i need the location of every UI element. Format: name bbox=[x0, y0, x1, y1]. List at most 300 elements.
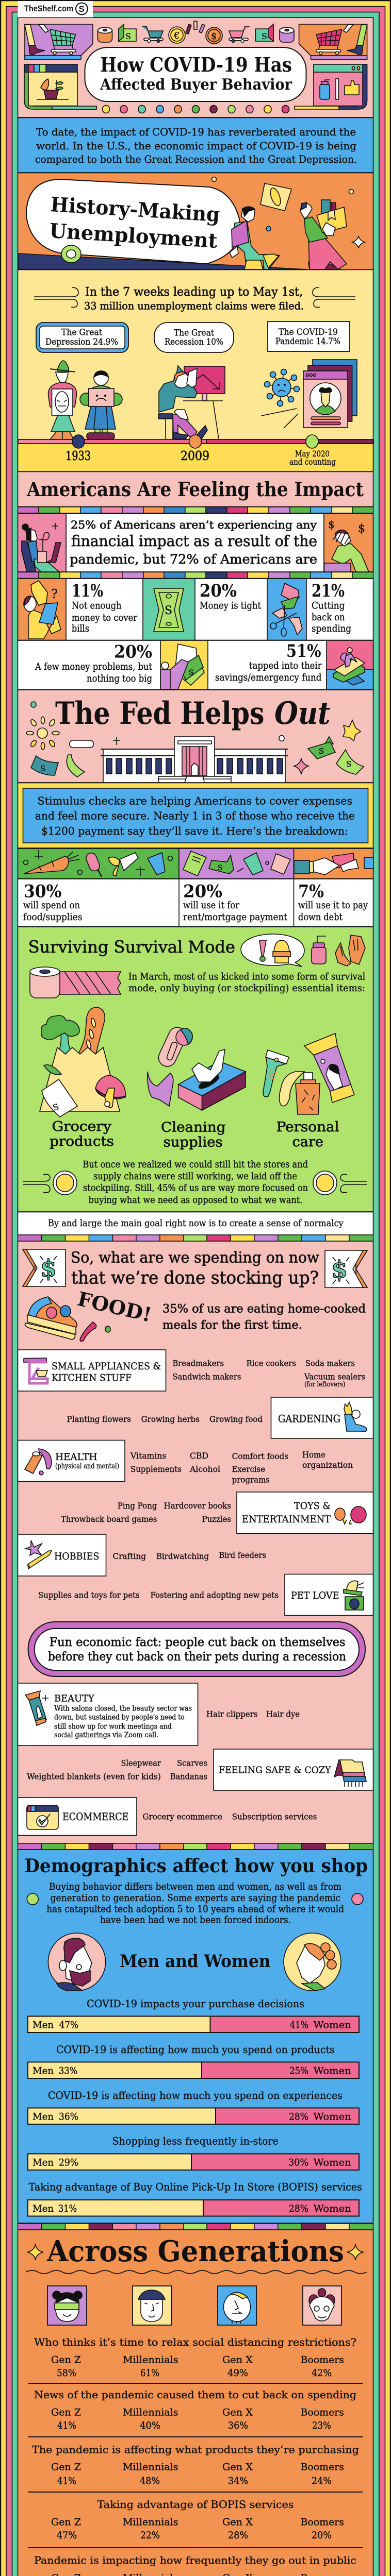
illustration: 2009 person at monitor bbox=[158, 366, 225, 441]
row: products purchasing: 48% bbox=[140, 2475, 160, 2486]
stat: 20 percent rent: rent/mortgage payment bbox=[183, 911, 287, 923]
row: relax restrictions: Boomers bbox=[300, 2354, 344, 2366]
row: products purchasing: Boomers bbox=[300, 2462, 344, 2473]
icon: hand with money: S bbox=[189, 669, 194, 677]
colour strip bbox=[18, 2224, 373, 2230]
wheel bbox=[61, 245, 81, 263]
category: health: HEALTH bbox=[55, 1451, 97, 1463]
callout: fun economic fact: Fun economic fact: people cut back on themselves bbox=[50, 1636, 345, 1649]
category: hobbies bbox=[18, 1534, 106, 1576]
row: relax restrictions: Gen Z bbox=[51, 2354, 81, 2366]
row: products purchasing: Millennials bbox=[123, 2462, 178, 2473]
chart: bopis services: Taking advantage of Buy Online Pick-Up In Store (BOPIS) services bbox=[29, 2180, 362, 2193]
category: toys and entertainment bbox=[237, 1492, 373, 1533]
illustration: woman at laptop bbox=[18, 514, 66, 572]
stat: 20 percent few problems: 20% bbox=[114, 642, 152, 663]
portrait: gen z bbox=[47, 2286, 87, 2325]
items: gardening: Growing food bbox=[209, 1414, 263, 1424]
illustration: right browser window bbox=[295, 64, 367, 109]
survival mode text: mode, only buying (or stockpiling) essential items: bbox=[128, 983, 365, 994]
illustration: walking man bbox=[230, 207, 280, 269]
chart: spend on products: 25% bbox=[289, 2065, 308, 2076]
panel: stimulus checks bbox=[18, 783, 373, 848]
row: cut back on spending: 40% bbox=[140, 2420, 160, 2431]
chart: shopping less in store: 29% bbox=[59, 2157, 78, 2168]
icon: person with tablet: ? bbox=[51, 587, 58, 601]
category: health: (physical and mental) bbox=[55, 1462, 119, 1470]
icons: handshake bbox=[294, 849, 373, 879]
icon: gloves bbox=[335, 935, 365, 966]
row: bopis services: 28% bbox=[228, 2530, 248, 2541]
chart: bopis services: 31% bbox=[58, 2203, 77, 2214]
chart: spend on products: COVID-19 is affecting how much you spend on products bbox=[56, 2043, 335, 2056]
row: relax restrictions: Millennials bbox=[123, 2354, 178, 2366]
chart: covid impacts purchase decisions bbox=[28, 1997, 359, 2032]
items: health: Supplements bbox=[131, 1464, 182, 1474]
category: small appliances: SMALL APPLIANCES & bbox=[52, 1361, 161, 1372]
icons: rent and bills: S bbox=[218, 864, 223, 872]
decoration: sparkles and wave bbox=[26, 2244, 367, 2274]
chart: bopis services: Women bbox=[314, 2203, 351, 2214]
items: hobbies: Crafting bbox=[112, 1551, 146, 1561]
chart: shopping less in store: Women bbox=[314, 2157, 351, 2168]
portrait: millennial bbox=[133, 2286, 172, 2325]
items: toys and entertainment: Puzzles bbox=[202, 1514, 231, 1524]
icons: food bbox=[18, 849, 179, 879]
callout: covid pandemic: The COVID-19 bbox=[279, 327, 338, 337]
stat: 7 percent: 7% bbox=[298, 881, 324, 902]
illustration: right shopper panel bbox=[299, 24, 367, 59]
stat: 7 percent: down debt bbox=[298, 911, 343, 923]
icon: cake slice bbox=[25, 1297, 110, 1342]
chart: spend on experiences: Men bbox=[32, 2111, 54, 2123]
callout: great depression: The Great bbox=[61, 328, 102, 338]
items: beauty: Hair clippers bbox=[206, 1709, 257, 1719]
category: pet love bbox=[285, 1574, 373, 1616]
panel: americans feeling the impact heading bbox=[18, 472, 373, 507]
panel: surviving survival mode bbox=[18, 927, 373, 1212]
icon: right dollar banner: $ bbox=[331, 1256, 348, 1283]
heading: Demographics affect how you shop bbox=[24, 1855, 368, 1877]
stat: 20 percent money tight: Money is tight bbox=[200, 600, 261, 611]
row: relax restrictions bbox=[28, 2336, 363, 2384]
stat: 51 percent bbox=[215, 641, 322, 683]
row: cut back on spending: Gen X bbox=[222, 2407, 253, 2418]
row: products purchasing bbox=[28, 2443, 363, 2493]
food text: meals for the first time. bbox=[162, 1319, 302, 1332]
items: ecommerce: Grocery ecommerce bbox=[142, 1811, 222, 1822]
callout: fun economic fact: before they cut back on their pets during a recession bbox=[48, 1650, 346, 1664]
demographics text: has catapulted tech adoption 5 to 10 years ahead of where it would bbox=[46, 1904, 344, 1914]
items: hobbies bbox=[112, 1550, 266, 1561]
items: pet love: Supplies and toys for pets bbox=[38, 1590, 140, 1600]
callout: covid pandemic: Pandemic 14.7% bbox=[275, 336, 340, 347]
statement text: 25% of Americans aren’t experiencing any bbox=[71, 519, 317, 531]
illustration: left browser window bbox=[24, 64, 96, 109]
icon: left dollar banner: $ bbox=[40, 1255, 57, 1282]
stat: 21 percent: spending bbox=[312, 623, 351, 634]
chart: bopis services: 28% bbox=[289, 2203, 308, 2214]
statement text: pandemic, but 72% of Americans are bbox=[70, 552, 317, 567]
illustration: man carrying box bbox=[300, 200, 347, 269]
category: beauty: BEAUTY bbox=[54, 1693, 95, 1704]
logo: S bbox=[78, 4, 85, 14]
items: pet love: Fostering and adopting new pets bbox=[151, 1590, 279, 1600]
stat: 20 percent money tight bbox=[200, 581, 261, 611]
category: beauty: With salons closed, the beauty sector was bbox=[54, 1704, 192, 1713]
row: bopis services bbox=[28, 2498, 363, 2548]
stat: 20 percent few problems bbox=[35, 642, 152, 684]
items: health: CBD bbox=[190, 1451, 208, 1461]
colour strip bbox=[18, 1843, 373, 1850]
stat: 20 percent rent: 20% bbox=[183, 881, 222, 902]
intro text bbox=[35, 126, 357, 165]
stat: 30 percent: will spend on bbox=[23, 900, 80, 911]
category: pet love: PET LOVE bbox=[291, 1590, 339, 1601]
title pill: Affected Buyer Behavior bbox=[100, 76, 292, 94]
chart: spend on experiences: 28% bbox=[289, 2111, 308, 2123]
portrait: boomer bbox=[303, 2286, 341, 2325]
chart: shopping less in store bbox=[28, 2135, 359, 2170]
items: toys and entertainment: Throwback board games bbox=[61, 1514, 157, 1524]
callout: great depression bbox=[36, 323, 128, 352]
heading bbox=[71, 1249, 319, 1288]
items: health bbox=[130, 1450, 353, 1485]
icon: falling dollar bills: S bbox=[346, 759, 351, 769]
category: gardening: GARDENING bbox=[278, 1413, 340, 1425]
portrait: woman bbox=[284, 1933, 341, 1991]
row: bopis services: Gen Z bbox=[51, 2516, 81, 2528]
stockpiling text: buying what we need as opposed to what we want. bbox=[89, 1195, 302, 1206]
row: bopis services: 20% bbox=[312, 2530, 332, 2541]
items: feeling safe and cozy bbox=[27, 1758, 207, 1782]
category: ecommerce: ECOMMERCE bbox=[62, 1810, 128, 1823]
items: small appliances: (for leftovers) bbox=[304, 1381, 346, 1388]
heading: men and women: Men and Women bbox=[120, 1951, 270, 1972]
row: relax restrictions: 58% bbox=[57, 2367, 76, 2379]
label: grocery products bbox=[50, 1119, 114, 1149]
icon row: shopping symbols: S bbox=[125, 31, 131, 41]
decoration: dots, cloud, stars bbox=[31, 702, 361, 774]
panel: financial stats row one bbox=[18, 579, 373, 640]
items: beauty: Hair dye bbox=[266, 1709, 300, 1719]
timeline labels: May 2020 bbox=[295, 449, 330, 459]
illustration: federal building bbox=[101, 737, 288, 783]
stat: 21 percent bbox=[312, 581, 351, 634]
demographics text: have been had we not been forced indoors. bbox=[100, 1914, 291, 1926]
items: health: Alcohol bbox=[189, 1464, 220, 1474]
heading: Across Generations bbox=[46, 2234, 344, 2268]
row: relax restrictions: Gen X bbox=[222, 2354, 253, 2366]
stat: 30 percent: 30% bbox=[24, 881, 61, 902]
label: personal care bbox=[276, 1120, 339, 1150]
chart: covid impacts purchase decisions: 41% bbox=[290, 2020, 308, 2031]
stat: 21 percent: back on bbox=[312, 612, 345, 623]
items: feeling safe and cozy: Weighted blankets (even for kids) bbox=[27, 1771, 161, 1782]
row: cut back on spending: Gen Z bbox=[51, 2407, 81, 2418]
label: personal care: Personal bbox=[276, 1120, 339, 1135]
food text bbox=[162, 1302, 366, 1332]
colour strip bbox=[18, 507, 373, 513]
category: ecommerce bbox=[18, 1798, 137, 1835]
label: personal care: care bbox=[292, 1134, 323, 1150]
items: small appliances: Rice cookers bbox=[247, 1358, 296, 1368]
icon row: shopping symbols: € bbox=[173, 30, 180, 41]
row: relax restrictions: Who thinks it’s time to relax social distancing restrictions? bbox=[34, 2336, 356, 2348]
logo bbox=[18, 1, 93, 18]
items: health: Exercise bbox=[232, 1464, 265, 1474]
title pill: How COVID-19 Has bbox=[100, 53, 292, 76]
items: beauty bbox=[206, 1709, 300, 1719]
row: products purchasing: 41% bbox=[57, 2475, 76, 2486]
stimulus text bbox=[35, 794, 355, 837]
row: products purchasing: The pandemic is affecting what products they’re purchasing bbox=[32, 2443, 359, 2455]
category: small appliances: KITCHEN STUFF bbox=[52, 1372, 132, 1384]
icon: left dollar banner bbox=[23, 1249, 66, 1286]
panel: across generations bbox=[18, 2230, 373, 2576]
stat: 30 percent bbox=[23, 881, 83, 923]
heading bubble: History-Making bbox=[50, 193, 221, 227]
items: health: Home bbox=[302, 1450, 325, 1460]
chart: covid impacts purchase decisions: 47% bbox=[59, 2020, 78, 2031]
row: relax restrictions: 61% bbox=[140, 2367, 159, 2379]
category: health bbox=[18, 1440, 125, 1482]
decoration: sun bbox=[26, 717, 59, 750]
category: small appliances bbox=[18, 1350, 166, 1391]
illustration: cleaning supplies bbox=[148, 1025, 246, 1110]
statement text bbox=[70, 519, 317, 567]
row: cut back on spending: Millennials bbox=[123, 2407, 178, 2418]
row: cut back on spending: 23% bbox=[312, 2420, 331, 2431]
items: health: programs bbox=[232, 1475, 270, 1485]
row: going out in public bbox=[34, 2554, 356, 2576]
panel: what are we spending on bbox=[18, 1241, 373, 1843]
callout: great recession bbox=[154, 323, 234, 352]
callout: covid pandemic bbox=[268, 321, 350, 351]
demographics text bbox=[46, 1882, 344, 1926]
row: cut back on spending: Boomers bbox=[300, 2407, 344, 2418]
timeline labels: and counting bbox=[289, 457, 336, 467]
category: beauty bbox=[18, 1683, 198, 1745]
illustration: personal care bbox=[263, 1033, 354, 1114]
icon: paper towel roll bbox=[30, 967, 121, 998]
panel: stimulus spending breakdown bbox=[18, 849, 373, 926]
items: toys and entertainment bbox=[61, 1501, 231, 1524]
chart: covid impacts purchase decisions: Women bbox=[314, 2020, 351, 2031]
items: health: Comfort foods bbox=[232, 1451, 288, 1461]
icon: bottle bbox=[312, 936, 326, 964]
survival mode text bbox=[128, 972, 365, 994]
timeline labels bbox=[66, 449, 336, 467]
items: health: Vitamins bbox=[130, 1451, 166, 1461]
row: bopis services: Millennials bbox=[123, 2516, 178, 2528]
row: cut back on spending: 41% bbox=[57, 2420, 76, 2431]
callout: great recession: Recession 10% bbox=[165, 337, 223, 347]
timeline labels: 2009 bbox=[181, 449, 209, 463]
heading: Out bbox=[274, 696, 331, 732]
panel: 25 percent statement bbox=[18, 514, 373, 572]
intro text: world. In the U.S., the economic impact of COVID-19 is being bbox=[36, 140, 356, 152]
items: ecommerce bbox=[142, 1811, 317, 1822]
row: bopis services: Gen X bbox=[222, 2516, 253, 2528]
heading bubble: Unemployment bbox=[48, 219, 218, 253]
stat: 11 percent: bills bbox=[72, 623, 89, 634]
category: feeling safe and cozy bbox=[214, 1749, 373, 1790]
heading: Surviving Survival Mode bbox=[28, 937, 235, 957]
items: small appliances bbox=[172, 1358, 365, 1388]
category: beauty: social gatherings via Zoom call. bbox=[54, 1731, 158, 1739]
illustration: stressed person: $ bbox=[328, 518, 335, 531]
chart: bopis services: Men bbox=[32, 2203, 54, 2214]
label: grocery products: Grocery bbox=[52, 1119, 111, 1134]
category: hobbies: HOBBIES bbox=[54, 1551, 99, 1562]
row: going out in public: Pandemic is impacting how frequently they go out in public bbox=[34, 2554, 356, 2567]
row: bopis services: Boomers bbox=[300, 2516, 344, 2528]
icon: squeezed dollar bill bbox=[143, 579, 195, 640]
panel: demographics bbox=[18, 1850, 373, 2223]
icon: person with tablet bbox=[18, 579, 66, 640]
stimulus text: $1200 payment say they’ll save it. Here’s the breakdown: bbox=[41, 825, 348, 837]
callout: great depression: Depression 24.9% bbox=[45, 337, 118, 347]
navy ground wedge bbox=[18, 253, 307, 269]
stockpiling text: stockpiling. Still, 45% of us are way more focused on bbox=[83, 1183, 308, 1193]
category: toys and entertainment: ENTERTAINMENT bbox=[242, 1514, 331, 1525]
category: toys and entertainment: TOYS & bbox=[294, 1500, 331, 1512]
category: beauty: still show up for work meetings and bbox=[54, 1723, 172, 1731]
items: toys and entertainment: Ping Pong bbox=[118, 1501, 157, 1511]
chart: spend on experiences: Women bbox=[314, 2111, 351, 2123]
stat: 11 percent: Not enough bbox=[72, 600, 122, 611]
heading: The Fed Helps bbox=[55, 696, 264, 732]
items: gardening bbox=[67, 1414, 263, 1424]
icon: scissors cutting ribbon bbox=[267, 579, 306, 640]
stat: 21 percent: Cutting bbox=[312, 600, 345, 611]
panel: unemployment timeline bbox=[18, 270, 373, 472]
illustration: 1933 figures bbox=[48, 361, 122, 439]
items: small appliances: Soda makers bbox=[305, 1358, 355, 1368]
decoration: right coin and swirl bbox=[313, 1171, 367, 1195]
row: bopis services: 47% bbox=[57, 2530, 77, 2541]
icons: rent and bills bbox=[179, 849, 294, 879]
row: cut back on spending bbox=[28, 2388, 363, 2437]
chart: spend on experiences: 36% bbox=[59, 2111, 78, 2123]
row: relax restrictions: 42% bbox=[312, 2367, 332, 2379]
items: gardening: Planting flowers bbox=[67, 1414, 131, 1424]
icon row: shopping symbols: S bbox=[262, 31, 267, 41]
row: cut back on spending: 36% bbox=[228, 2420, 248, 2431]
row: products purchasing: Gen Z bbox=[51, 2462, 81, 2473]
chart: shopping less in store: Men bbox=[32, 2157, 54, 2168]
stat: 20 percent money tight: 20% bbox=[200, 581, 237, 601]
chart: covid impacts purchase decisions: Men bbox=[32, 2020, 54, 2031]
decoration: side dots bbox=[27, 1893, 363, 1905]
row: products purchasing: 34% bbox=[228, 2475, 248, 2486]
icon: falling dollar bills bbox=[31, 742, 364, 777]
demographics text: generation to generation. Some experts are saying the pandemic bbox=[51, 1893, 340, 1904]
row: bopis services: Taking advantage of BOPIS services bbox=[97, 2498, 294, 2511]
stat: 11 percent: money to cover bbox=[72, 612, 138, 623]
callout: great recession: The Great bbox=[174, 328, 214, 338]
items: feeling safe and cozy: Bandanas bbox=[170, 1771, 207, 1782]
statement text: financial impact as a result of the bbox=[71, 532, 317, 550]
chart: spend on experiences bbox=[28, 2089, 359, 2124]
label: grocery products: products bbox=[50, 1134, 114, 1149]
panel: financial stats row two bbox=[18, 640, 373, 690]
decoration: left coin and swirl bbox=[23, 1171, 77, 1195]
stat: 51 percent: savings/emergency fund bbox=[215, 672, 322, 683]
illustration: stressed person: $ bbox=[358, 522, 365, 535]
panel: normalcy callout bbox=[18, 1212, 373, 1235]
items: hobbies: Bird feeders bbox=[219, 1550, 266, 1560]
stat: 7 percent: will use it to pay bbox=[298, 900, 368, 911]
icon: speech bubble with alert bbox=[241, 934, 304, 967]
items: ecommerce: Subscription services bbox=[232, 1811, 317, 1822]
chart: covid impacts purchase decisions: COVID-19 impacts your purchase decisions bbox=[87, 1997, 304, 2010]
survival mode text: In March, most of us kicked into some form of survival bbox=[128, 972, 365, 982]
colour strip bbox=[18, 1235, 373, 1241]
row: relax restrictions: 49% bbox=[227, 2367, 248, 2379]
heading text bbox=[84, 285, 304, 312]
label: cleaning supplies: Cleaning bbox=[161, 1120, 226, 1136]
stat: 11 percent bbox=[72, 581, 138, 634]
decorative dots row bbox=[102, 105, 289, 113]
icon: squeezed dollar bill: S bbox=[165, 604, 172, 617]
icon: falling dollar bills: S bbox=[319, 747, 324, 756]
items: toys and entertainment: Hardcover books bbox=[164, 1501, 231, 1511]
panel: americans feeling the impact heading: Americans Are Feeling the Impact bbox=[26, 478, 364, 501]
illustration: left shopper panel bbox=[25, 24, 93, 59]
illustration: grocery products: S bbox=[52, 1101, 60, 1113]
chart: spend on experiences: COVID-19 is affecting how much you spend on experiences bbox=[48, 2089, 343, 2102]
icon: person on stack of money bbox=[327, 640, 373, 690]
label: cleaning supplies: supplies bbox=[164, 1134, 223, 1150]
heading: that we’re done stocking up? bbox=[71, 1267, 319, 1288]
stimulus text: Stimulus checks are helping Americans to cover expenses bbox=[37, 794, 352, 807]
icon: hand with money bbox=[160, 640, 208, 689]
illustration: price tag card bbox=[260, 183, 291, 211]
panel: header bbox=[18, 1, 373, 117]
stimulus text: and feel more secure. Nearly 1 in 3 of those who receive the bbox=[35, 810, 355, 822]
items: pet love bbox=[38, 1590, 279, 1600]
panel: intro bbox=[18, 117, 373, 173]
intro text: compared to both the Great Recession and the Great Depression. bbox=[35, 153, 357, 165]
row: bopis services: 22% bbox=[140, 2530, 160, 2541]
row: products purchasing: 24% bbox=[312, 2475, 332, 2486]
chart: shopping less in store: Shopping less frequently in-store bbox=[112, 2135, 279, 2147]
chart: bopis services bbox=[28, 2180, 362, 2216]
stat: 20 percent few problems: A few money problems, but bbox=[35, 661, 152, 672]
stat: 11 percent: 11% bbox=[72, 581, 103, 601]
icon: falling dollar bills: S bbox=[40, 764, 45, 773]
demographics text: Buying behavior differs between men and women, as well as from bbox=[49, 1882, 341, 1892]
items: small appliances: Vacuum sealers bbox=[304, 1371, 365, 1382]
illustration: stressed person bbox=[324, 514, 373, 572]
food text: 35% of us are eating home-cooked bbox=[162, 1302, 366, 1316]
panel: the fed helps out bbox=[18, 690, 373, 783]
icon: right dollar banner bbox=[325, 1250, 367, 1287]
heading: So, what are we spending on now bbox=[71, 1249, 319, 1266]
decorative rings and sparkle bbox=[211, 177, 365, 248]
category: feeling safe and cozy: FEELING SAFE & COZY bbox=[219, 1765, 332, 1775]
row: cut back on spending: News of the pandemic caused them to cut back on spending bbox=[34, 2388, 356, 2401]
stat: 21 percent: 21% bbox=[312, 581, 345, 601]
stockpiling text: But once we realized we could still hit the stores and bbox=[83, 1160, 308, 1170]
label: cleaning supplies bbox=[161, 1120, 226, 1150]
illustration: virus bbox=[262, 369, 299, 428]
chart: spend on products: 33% bbox=[59, 2065, 77, 2076]
stat: 30 percent: food/supplies bbox=[23, 911, 83, 923]
items: small appliances: Breadmakers bbox=[172, 1358, 224, 1368]
